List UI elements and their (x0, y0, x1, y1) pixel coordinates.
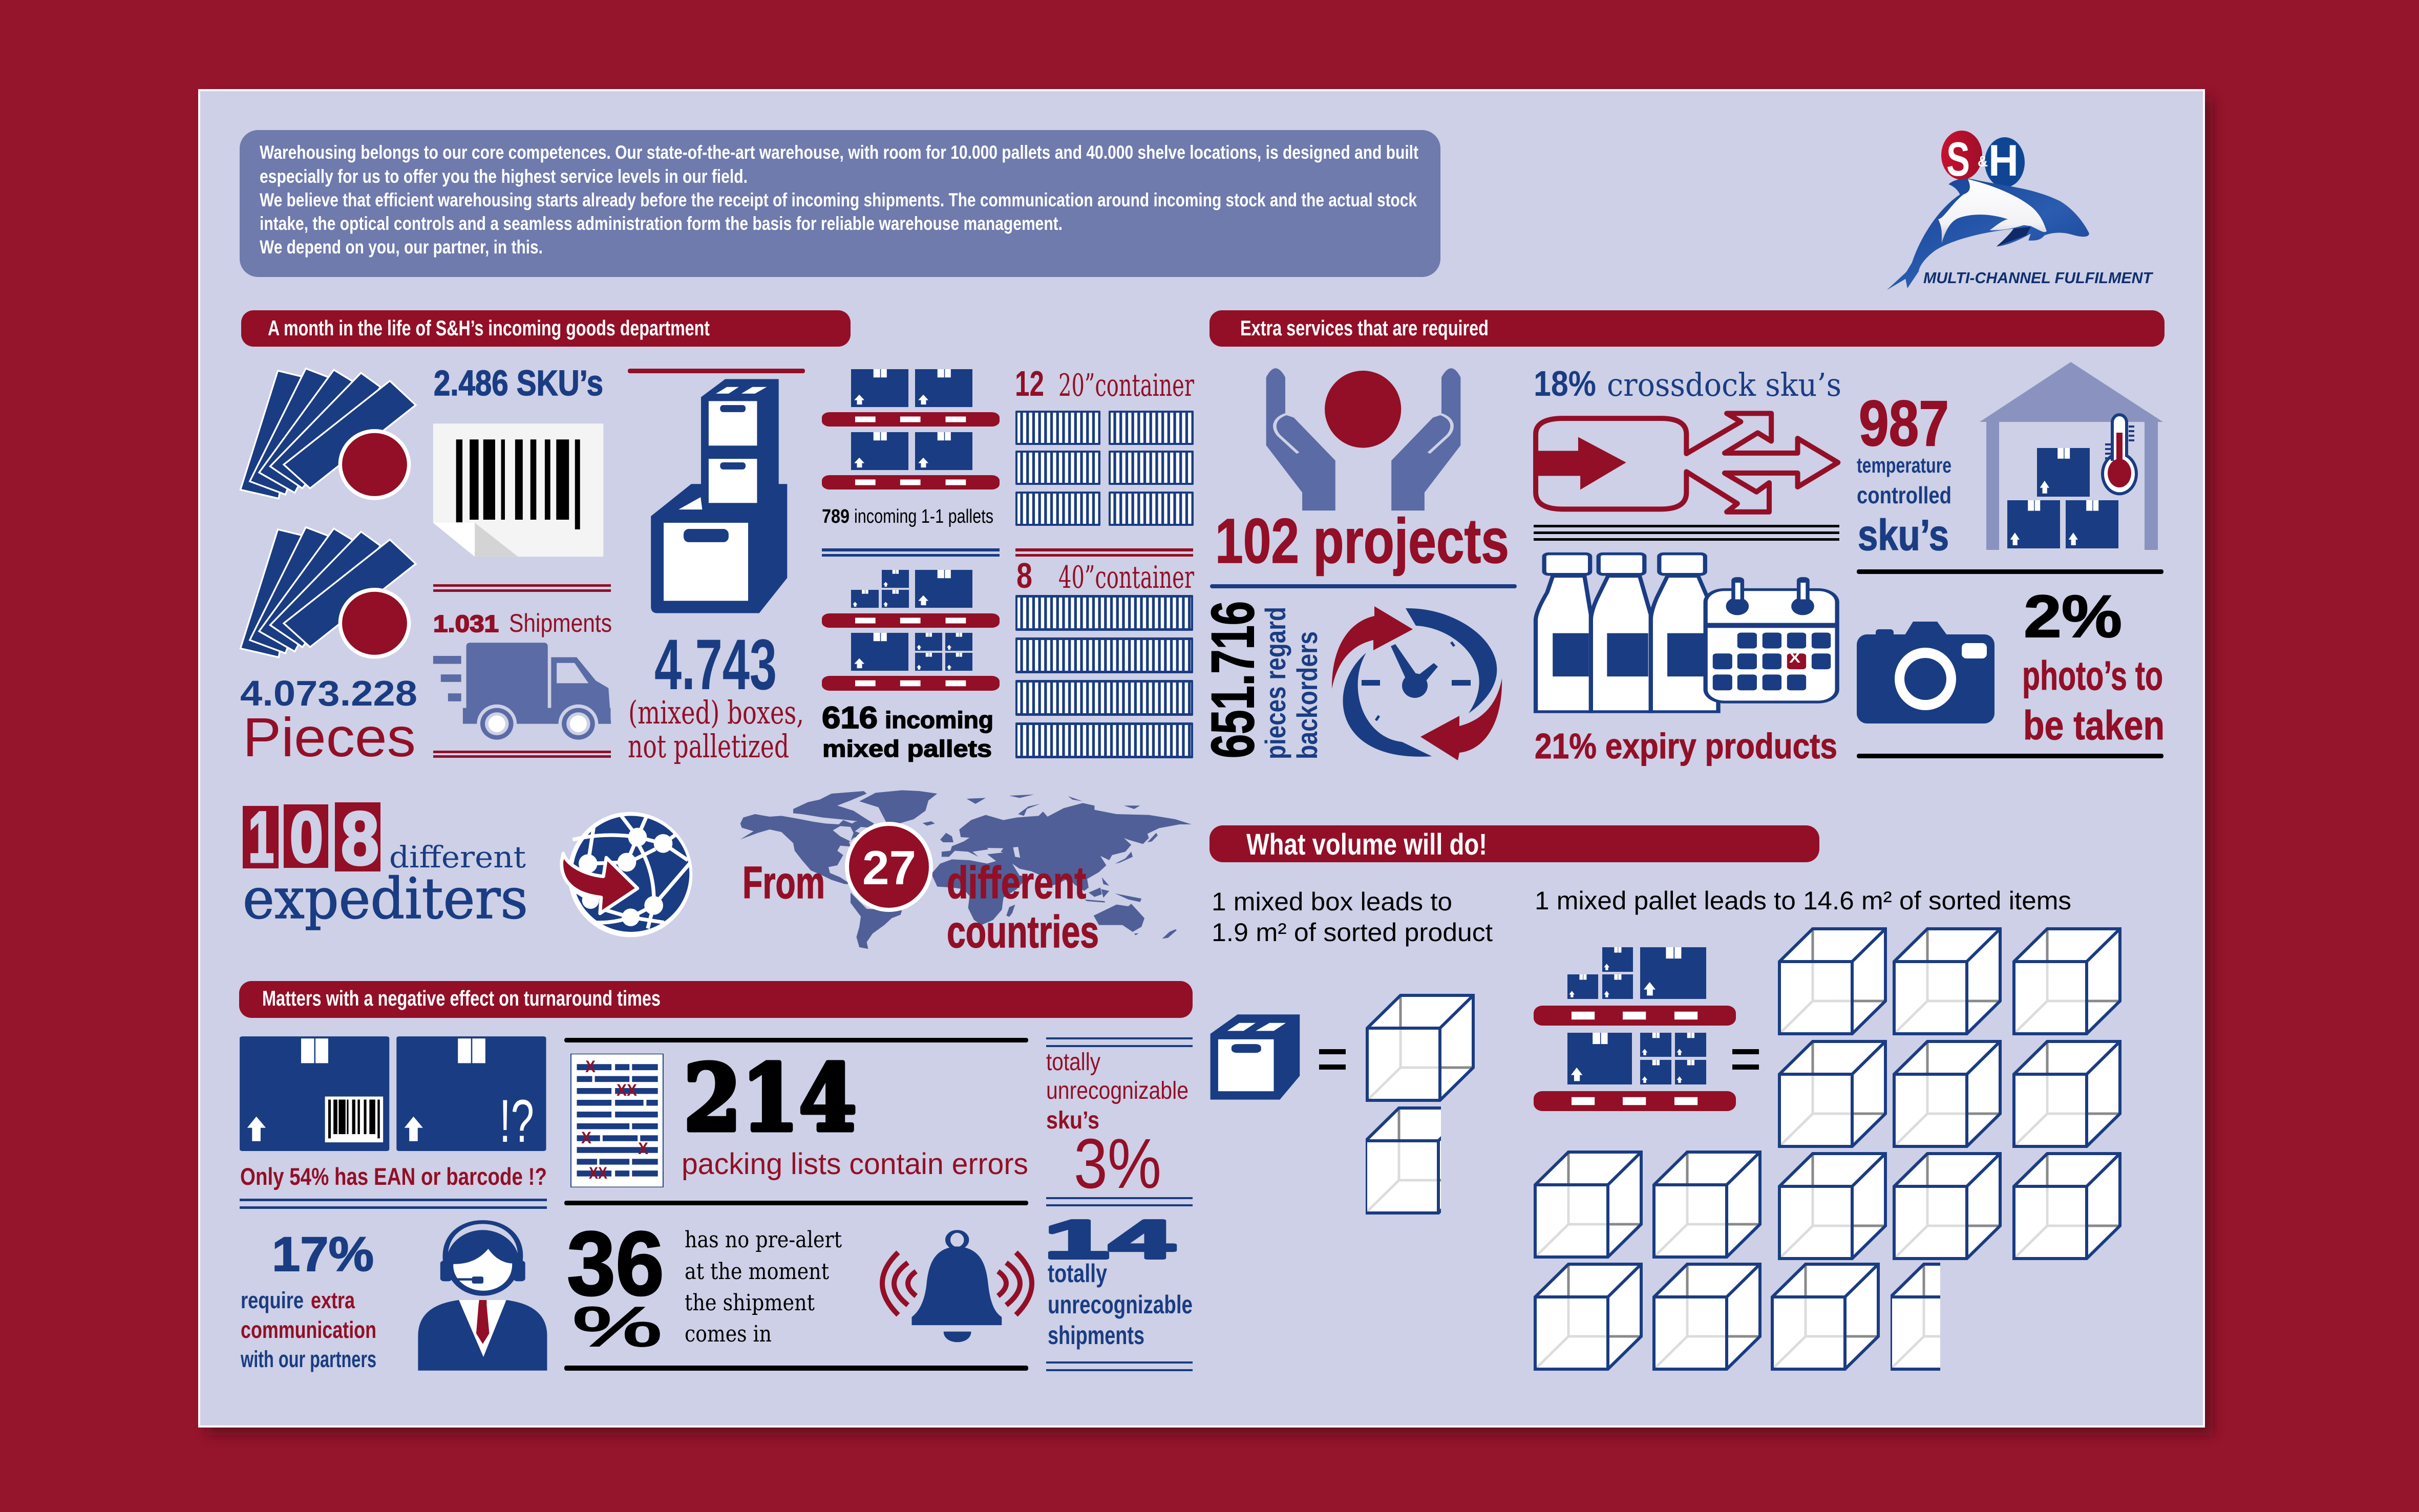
intro text box: intake, the optical controls and a seamless administration form the basis for reliable warehouse management. (260, 213, 1063, 234)
heading: Matters with a negative effect (239, 981, 1193, 1018)
stat: 616 mixed pallets (822, 700, 993, 762)
main panel (199, 90, 2204, 1426)
stat: 2% photos (2022, 583, 2165, 748)
SKU cards icon 2 (241, 527, 416, 657)
logo letters: S (1946, 132, 1970, 186)
bottles icon (1536, 554, 1718, 712)
stat: 36% no pre-alert: the shipment (685, 1290, 815, 1316)
text: 1 mixed box (1212, 887, 1493, 947)
stat: 18% crossdock (1534, 364, 1841, 403)
mixed pallet icon (1534, 947, 1736, 1111)
stat: 12 20 inch container: 12 (1015, 364, 1044, 403)
stat: 3% unrecognizable skus: unrecognizable (1046, 1077, 1189, 1104)
carton with barcode (240, 1036, 389, 1151)
stat: 36% no pre-alert: 36 (567, 1212, 664, 1314)
carton with question mark (396, 1036, 546, 1155)
stat: 14 unrecognizable shipments (1044, 1209, 1193, 1350)
stat: 18% crossdock: crossdock sku’s (1607, 366, 1841, 403)
pallets: mixed (822, 570, 1000, 691)
stat: 2% photos: photo’s to (2022, 653, 2163, 698)
stat: 14 unrecognizable shipments: totally (1048, 1259, 1107, 1288)
stat: 4.743 mixed boxes (628, 624, 804, 765)
stat: 1.031 Shipments: 1.031 (433, 610, 499, 637)
camera icon (1857, 622, 1994, 723)
warehouse icon (1980, 362, 2163, 550)
stat: From 27 different countries (742, 824, 1099, 957)
stat: 651.716 backorders (1199, 601, 1323, 759)
stat: 36% no pre-alert: at the moment (685, 1259, 829, 1285)
stat: 8 40 inch container (1016, 556, 1194, 595)
stat: 17% require extra communication: require (241, 1287, 304, 1313)
stat: 4.073.228 Pieces: Pieces (243, 706, 416, 768)
sorted cubes grid (1535, 929, 2120, 1369)
stat: 12 20 inch container: 20”container (1058, 368, 1194, 403)
stat: 3% unrecognizable skus: totally (1046, 1049, 1100, 1076)
intro text box: Warehousing belongs to our core competences. Our state-of-the-art warehouse, with room for 10.000 pallets and 40.000 shelve locations, is designed and built (260, 142, 1418, 163)
logo H disc (1985, 137, 2025, 187)
hands icon (1266, 368, 1460, 510)
thermometer icon (2103, 415, 2136, 494)
barcode label icon (433, 423, 603, 557)
stat: 18% crossdock: 18% (1534, 364, 1596, 403)
text: 1 mixed pallet: 1 mixed pallet leads to 14.6 m² of sorted items (1535, 886, 2071, 915)
stat: 616 mixed pallets: incoming (885, 707, 993, 733)
panel shadow (207, 98, 2213, 1435)
stat: 14 unrecognizable shipments: 14 (1044, 1209, 1174, 1270)
text: only 54% has EAN: Only 54% has EAN or barcode !? (240, 1163, 547, 1190)
stat: 14 unrecognizable shipments: unrecognizable (1048, 1290, 1193, 1319)
20 inch containers (1015, 411, 1194, 526)
stat: 616 mixed pallets: mixed pallets (822, 735, 992, 762)
stat: 651.716 backorders: backorders (1291, 631, 1323, 759)
intro text box: We believe that efficient warehousing starts already before the receipt of incoming shipments. The communication around incoming stock and the actual stock (260, 189, 1417, 210)
packing list document icon: X (581, 1128, 592, 1147)
equals sign (1319, 1049, 1346, 1070)
stat: 17% require extra communication (240, 1227, 376, 1372)
heading: Matters with a negative effect: Matters with a negative effect on turnaround times (262, 986, 661, 1010)
stat: 36% no pre-alert: has no pre-alert (685, 1227, 842, 1253)
40 inch containers (1015, 595, 1193, 758)
stat: 616 mixed pallets: 616 (822, 700, 878, 735)
stat: 987 temperature controlled: controlled (1857, 482, 1951, 508)
stat: 987 temperature controlled (1857, 388, 1951, 559)
intro text box (240, 130, 1440, 277)
dolphin (1887, 179, 2089, 290)
packing list document icon: X (638, 1139, 649, 1158)
packing list document icon: XX (617, 1081, 638, 1099)
stat: 214 packing lists: 214 (684, 1045, 857, 1152)
stat: From 27 different countries: different (947, 857, 1086, 908)
heading: Extra services (1210, 310, 2165, 347)
stat: 987 temperature controlled: 987 (1859, 388, 1949, 459)
logo: S&H dolphin: & (1978, 153, 1988, 170)
stat: 17% require extra communication: 17% (272, 1227, 374, 1282)
stat: 17% require extra communication: communication (241, 1316, 376, 1343)
stat: 789 pallets (822, 506, 993, 527)
stat: 4.743 mixed boxes: 4.743 (654, 624, 777, 705)
sorted cube partial (1366, 1106, 1441, 1215)
world map (740, 790, 1192, 949)
stat: 108 different expediters: 8 (341, 797, 379, 881)
stat: 17% require extra communication: with our partners (240, 1346, 376, 1372)
stat: From 27 different countries: countries (947, 906, 1099, 957)
stat: 789 pallets: 789 (822, 506, 850, 527)
stat: 108 different expediters: different (389, 840, 526, 875)
crossdock arrows icon (1536, 413, 1838, 512)
stat: 214 packing lists: packing lists contain errors (682, 1147, 1028, 1181)
stat: 2.486 SKU's: 2.486 SKU’s (434, 363, 603, 403)
stat: 3% unrecognizable skus (1046, 1049, 1189, 1203)
clock with arrows icon (1332, 606, 1502, 760)
packing list document icon (571, 1054, 663, 1187)
carton with question mark: !? (499, 1088, 534, 1155)
heading: What volume will do (1210, 825, 1819, 862)
intro text box: especially for us to offer you the highest service levels in our field. (260, 166, 748, 187)
stat: 108 different expediters: expediters (243, 866, 528, 931)
truck icon (433, 643, 611, 743)
stat: 2% photos: be taken (2023, 702, 2165, 748)
stat: 108 different expediters: 1 (248, 797, 274, 877)
logo: S&H dolphin: H (1988, 136, 2019, 185)
heading: What volume will do: What volume will do! (1246, 828, 1487, 861)
stat: 108 different expediters: 0 (290, 797, 323, 877)
stat: 987 temperature controlled: sku’s (1858, 511, 1949, 559)
stat: 108 different expediters (243, 797, 528, 931)
stat: 21% expiry products: 21% expiry products (1535, 726, 1837, 766)
stat: 651.716 backorders: pieces regard (1259, 607, 1291, 759)
intro text box: We depend on you, our partner, in this. (260, 237, 543, 258)
sorted cube (1367, 995, 1473, 1100)
stat: 36% no pre-alert (567, 1212, 842, 1359)
logo tagline: MULTI-CHANNEL FULFILMENT (1923, 269, 2154, 287)
stat: From 27 different countries: From (742, 857, 825, 908)
heading: A month in the life (241, 310, 851, 347)
stat: 14 unrecognizable shipments: shipments (1048, 1321, 1144, 1350)
stat: 8 40 inch container: 8 (1016, 556, 1032, 595)
stat: 4.743 mixed boxes: not palletized (628, 728, 789, 765)
alert bell icon (882, 1231, 1032, 1342)
stat: 36% no pre-alert: % (572, 1294, 663, 1359)
stat: 102 projects: 102 projects (1215, 506, 1509, 577)
stat: 12 20 inch container (1015, 364, 1194, 403)
pallets: 1-1 (822, 369, 1000, 489)
logo S disc (1941, 131, 1982, 180)
stat: 8 40 inch container: 40”container (1058, 560, 1194, 595)
calendar icon (1706, 577, 1837, 702)
stat: 987 temperature controlled: temperature (1857, 453, 1951, 477)
equals sign (1732, 1049, 1759, 1070)
stat: 3% unrecognizable skus: sku’s (1046, 1107, 1099, 1134)
mixed box icon (1211, 1014, 1300, 1100)
text: 1 mixed box: 1 mixed box leads to (1212, 887, 1452, 916)
support agent icon (418, 1222, 547, 1371)
stat: 4.743 mixed boxes: (mixed) boxes, (628, 694, 804, 731)
stat: 36% no pre-alert: comes in (685, 1321, 772, 1347)
stat: 651.716 backorders: 651.716 (1199, 601, 1267, 758)
packing list document icon: X (585, 1057, 596, 1076)
stat: 17% require extra communication: extra (311, 1287, 355, 1313)
stat: 1.031 Shipments (433, 609, 612, 637)
heading: Extra services: Extra services that are required (1240, 316, 1489, 340)
stat: 4.073.228 Pieces (240, 673, 417, 768)
logo: S&H dolphin (1887, 131, 2154, 290)
SKU cards icon (241, 369, 416, 499)
globe with arrow icon (562, 812, 692, 937)
text: 1 mixed box: 1.9 m² of sorted product (1212, 918, 1493, 947)
stat: 3% unrecognizable skus: 3% (1074, 1124, 1161, 1203)
packing list document icon: XX (589, 1164, 608, 1182)
calendar X mark: X (1789, 650, 1800, 666)
stat: 4.073.228 Pieces: 4.073.228 (240, 673, 417, 713)
stat: 2% photos: 2% (2024, 583, 2122, 650)
stat: 1.031 Shipments: Shipments (509, 609, 612, 637)
stacked boxes icon (651, 379, 787, 613)
heading: A month in the life: A month in the life of S&H’s incoming goods department (268, 316, 710, 340)
stat: From 27 different countries: 27 (862, 841, 916, 895)
stat: 214 packing lists (682, 1045, 1028, 1181)
stat: 789 pallets: incoming 1-1 pallets (854, 506, 993, 527)
